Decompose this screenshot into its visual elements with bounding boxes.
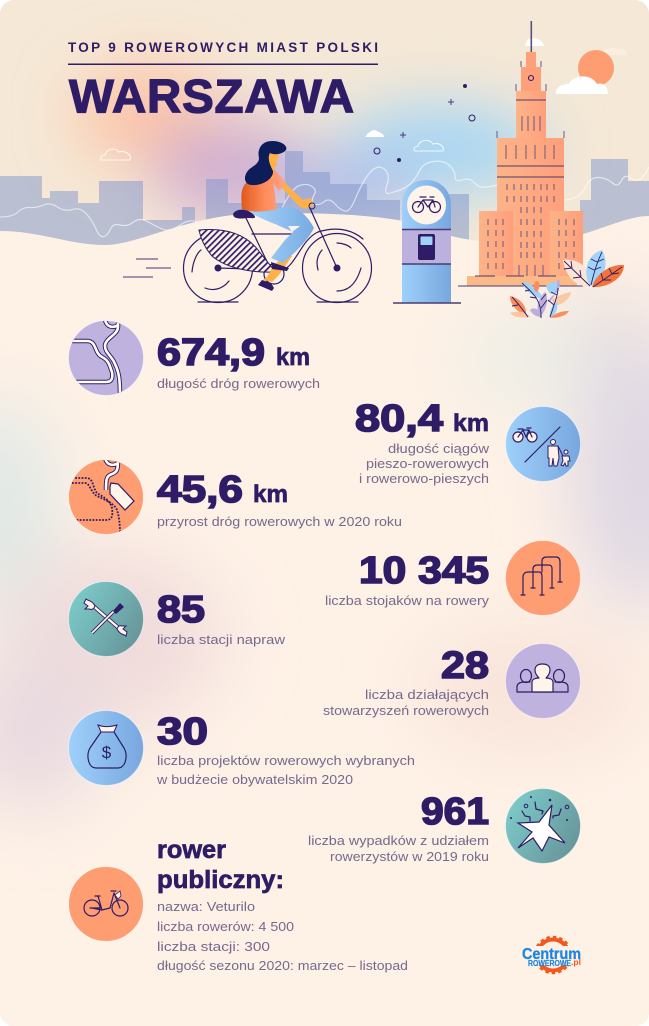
stat: road growth: 45,6 — [157, 469, 243, 511]
stat: public bike: liczba rowerów: 4 500 — [157, 919, 294, 934]
icon: road map — [66, 320, 144, 396]
icon: collision burst — [506, 788, 580, 864]
background sky panel — [0, 0, 649, 245]
stat: cycle road length: km — [276, 344, 310, 371]
logo: Centrum Rowerowe — [522, 937, 583, 973]
road line — [0, 161, 649, 237]
icon: wrench and screwdriver — [68, 582, 144, 656]
plants bottom — [510, 279, 571, 318]
stat: associations: 28 — [441, 645, 489, 687]
icon: bike and pedestrians — [506, 406, 580, 482]
icon: road and marker — [68, 458, 144, 534]
stat: public bike — [68, 836, 408, 973]
stat: shared paths: 80,4 — [355, 398, 443, 440]
icon: money bag: $ — [102, 743, 112, 762]
stat: public bike: nazwa: Veturilo — [157, 899, 255, 914]
sun and clouds — [556, 47, 626, 94]
stat: accidents — [308, 788, 580, 864]
stat: associations: liczba działających — [365, 687, 489, 702]
palace of culture — [458, 21, 583, 286]
stat: cycle road length: 674,9 — [157, 332, 265, 374]
icon: city bike — [68, 866, 144, 942]
lower background tint — [0, 290, 649, 810]
stat: accidents: 961 — [421, 791, 489, 833]
heading: Warszawa: WARSZAWA — [69, 70, 354, 124]
stat: repair stations: 85 — [157, 589, 205, 631]
stat: road growth: przyrost dróg rowerowych w 2020 roku — [157, 514, 402, 529]
logo: Centrum Rowerowe: .pl — [571, 958, 581, 967]
stat: road growth: km — [253, 481, 288, 508]
decorative clouds and dots — [101, 84, 475, 162]
stat: citizen budget projects: w budżecie obywatelskim 2020 — [156, 772, 353, 787]
stat: shared paths — [355, 398, 580, 486]
stat: citizen budget projects: liczba projektów rowerowych wybranych — [157, 753, 415, 768]
stat: bike racks: liczba stojaków na rowery — [325, 593, 490, 608]
icon: group of people — [506, 644, 580, 718]
cyclist on bike — [123, 141, 372, 302]
logo: Centrum Rowerowe: ROWEROWE — [528, 959, 572, 968]
skyline — [0, 151, 649, 250]
icon: bike racks — [506, 540, 580, 616]
bike station kiosk — [393, 180, 461, 303]
stat: citizen budget projects — [68, 710, 415, 787]
stat: repair stations: liczba stacji napraw — [157, 632, 286, 647]
stat: citizen budget projects: 30 — [157, 711, 208, 753]
stat: shared paths: długość ciągów — [388, 441, 490, 456]
title: TOP 9 ROWEROWYCH MIAST POLSKI — [68, 40, 378, 55]
stat: shared paths: i rowerowo-pieszych — [359, 471, 489, 486]
stat: road growth — [68, 458, 402, 534]
stat: associations: stowarzyszeń rowerowych — [323, 703, 489, 718]
stat: accidents: rowerzystów w 2019 roku — [330, 849, 489, 864]
stat: cycle road length — [66, 320, 320, 396]
stat: public bike: liczba stacji: 300 — [157, 939, 270, 954]
icon: money bag — [68, 710, 144, 786]
stat: bike racks — [325, 540, 580, 616]
stat: bike racks: 10 345 — [359, 550, 489, 592]
stat: public bike: rower — [157, 836, 226, 864]
plants right — [563, 250, 624, 287]
stat: accidents: liczba wypadków z udziałem — [308, 833, 489, 848]
stat: associations — [323, 644, 580, 718]
stat: cycle road length: długość dróg rowerowych — [157, 376, 320, 391]
hill — [0, 213, 649, 280]
stat: repair stations — [68, 582, 286, 656]
stat: public bike: publiczny: — [157, 866, 284, 894]
logo: Centrum Rowerowe: Centrum — [522, 946, 581, 963]
stat: shared paths: km — [453, 410, 489, 437]
stat: shared paths: pieszo-rowerowych — [366, 456, 489, 471]
stat: public bike: długość sezonu 2020: marzec – listopad — [157, 958, 408, 973]
